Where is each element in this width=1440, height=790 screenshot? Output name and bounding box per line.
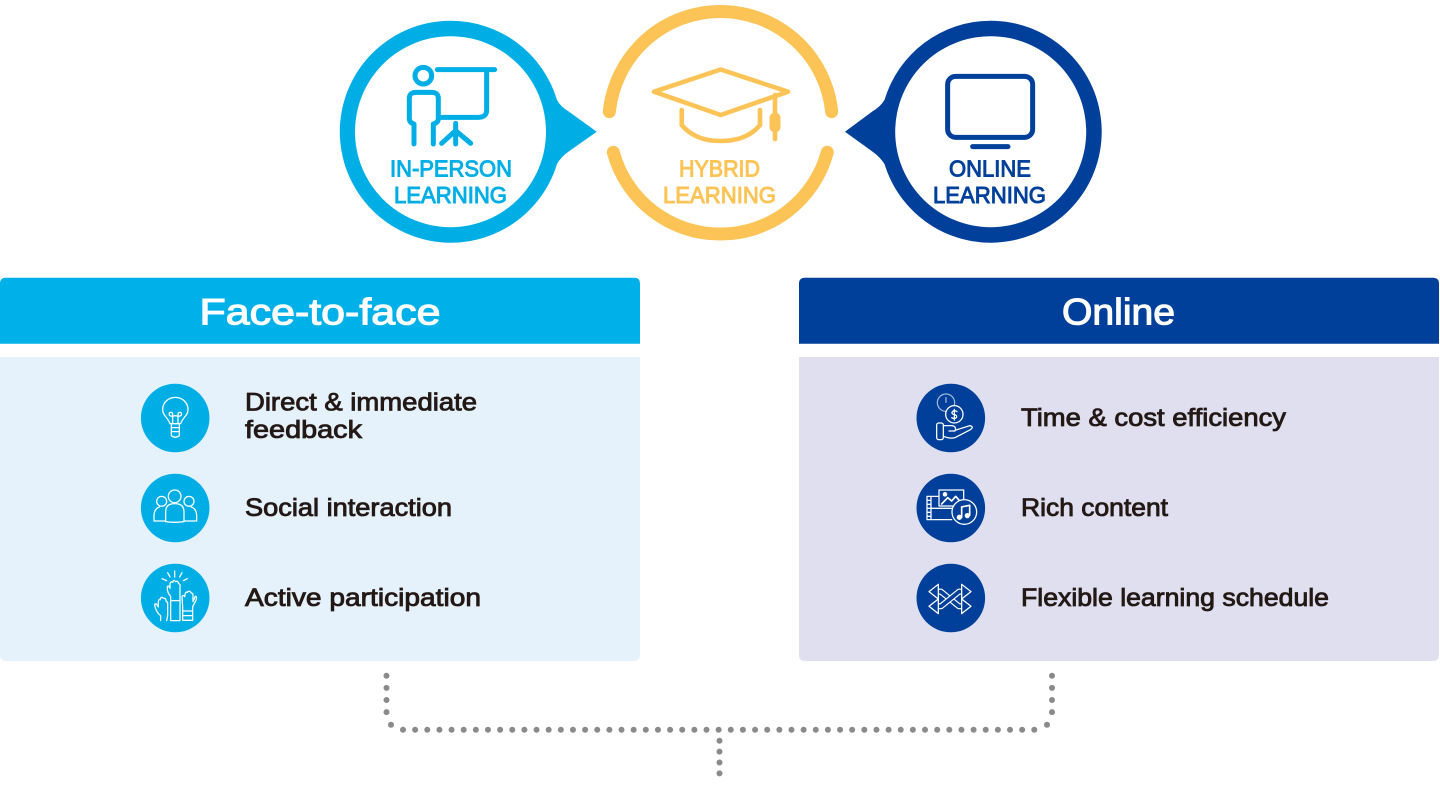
item: direct and immediate feedback: feedback	[245, 416, 363, 444]
item: direct and immediate feedback	[141, 384, 477, 452]
panel body	[799, 357, 1439, 661]
item: rich content: Rich content	[1021, 494, 1168, 522]
label: in-person learning: IN-PERSON	[390, 156, 512, 182]
icon: teacher at board	[409, 67, 495, 144]
item: social interaction: Social interaction	[245, 494, 452, 522]
item: time and cost efficiency: Time & cost efficiency	[1021, 404, 1287, 432]
item: time and cost efficiency	[916, 384, 1287, 452]
dotted bracket connector	[386, 676, 1052, 775]
item: direct and immediate feedback: Direct & immediate	[245, 388, 477, 416]
icon: graduation cap	[654, 70, 788, 141]
bubble outline with pointer	[845, 21, 1102, 243]
label: hybrid learning: HYBRID	[679, 156, 760, 182]
hybrid learning ring	[609, 11, 832, 234]
item: active participation: Active participation	[245, 584, 481, 612]
label: hybrid learning: LEARNING	[663, 182, 776, 208]
label: online learning: ONLINE	[949, 156, 1031, 182]
ring arcs	[609, 11, 832, 234]
in-person learning bubble	[340, 21, 597, 243]
label: online learning	[933, 156, 1046, 208]
item: flexible learning schedule	[916, 564, 1329, 632]
panel header	[0, 278, 640, 344]
heading: face-to-face: Face-to-face	[200, 292, 440, 332]
item: social interaction	[141, 474, 452, 542]
icon: monitor	[948, 76, 1033, 147]
item: rich content	[916, 474, 1168, 542]
panel header	[799, 278, 1439, 344]
bubble outline with pointer	[340, 21, 597, 243]
panel body	[0, 357, 640, 661]
item: active participation	[141, 564, 481, 632]
label: online learning: LEARNING	[933, 182, 1046, 208]
panel: face-to-face	[0, 278, 640, 661]
label: in-person learning: LEARNING	[394, 182, 507, 208]
label: hybrid learning	[663, 156, 776, 208]
online learning bubble	[845, 21, 1102, 243]
label: in-person learning	[390, 156, 512, 208]
panel: online	[799, 278, 1439, 661]
heading: online: Online	[1062, 292, 1175, 332]
item: flexible learning schedule: Flexible learning schedule	[1021, 584, 1329, 612]
